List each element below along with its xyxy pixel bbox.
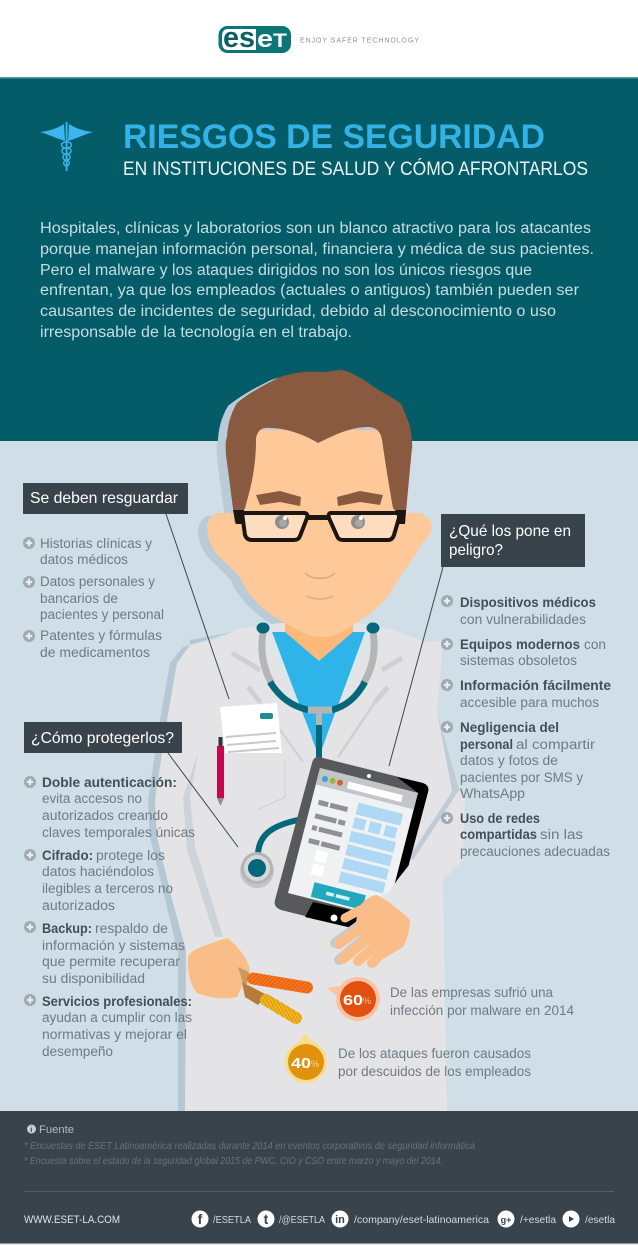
right hand: [335, 895, 410, 963]
social links: f: [198, 1211, 203, 1227]
list: how to protect: que permite recuperar: [42, 954, 181, 969]
face: [207, 430, 432, 637]
tablet: [275, 757, 428, 935]
heading: Cómo protegerlos: ¿Cómo protegerlos?: [31, 730, 174, 747]
fingers: [339, 925, 392, 963]
social links: g+: [501, 1215, 511, 1225]
logo: ESET: es: [223, 22, 255, 54]
social links: /@ESETLA: [279, 1214, 325, 1226]
list: how to protect: Backup:: [42, 921, 92, 936]
social links: /+esetla: [520, 1214, 556, 1226]
stat: 60%: De las empresas sufrió una: [390, 985, 553, 1000]
stat: 40%: [285, 1033, 531, 1083]
list: what to protect: pacientes y personal: [40, 607, 164, 622]
list: how to protect: ilegibles a terceros no: [42, 881, 173, 896]
list: dangers: con vulnerabilidades: [460, 612, 586, 627]
social links: /ESETLA: [213, 1214, 251, 1226]
title: RIESGOS DE SEGURIDAD: [123, 118, 545, 156]
icon: caduceus: [40, 122, 93, 171]
list: what to protect: bancarios de: [40, 591, 118, 606]
source heading: i: [30, 1125, 32, 1134]
list: dangers: personal: [460, 737, 513, 752]
list: what to protect: Datos personales y: [40, 574, 155, 589]
list: how to protect: ayudan a cumplir con las: [42, 1010, 192, 1025]
intro paragraph: irresponsable de la tecnología en el trabajo.: [40, 324, 352, 341]
list: what to protect: de medicamentos: [40, 645, 150, 660]
illustration: doctor: [148, 370, 465, 1111]
list: how to protect: [24, 775, 195, 1059]
nose and mouth: [305, 573, 335, 599]
social links: t: [264, 1211, 269, 1227]
source heading: Fuente: [39, 1124, 74, 1136]
list: what to protect: datos médicos: [40, 552, 128, 567]
intro paragraph: Pero el malware y los ataques dirigidos no son los únicos riesgos que: [40, 262, 532, 279]
list: dangers: pacientes por SMS y: [460, 770, 583, 785]
list: how to protect: claves temporales únicas: [42, 825, 195, 840]
glasses: [233, 510, 406, 540]
list: dangers: [441, 595, 611, 859]
list: how to protect: Doble autenticación:: [42, 775, 177, 790]
list: what to protect: Patentes y fórmulas: [40, 628, 162, 643]
stethoscope: [240, 622, 380, 888]
list: how to protect: desempeño: [42, 1044, 113, 1059]
yellow band-aid: [242, 982, 296, 1018]
heading: Se deben resguardar: Se deben resguardar: [30, 490, 179, 507]
heading: Qué los pone en peligro: peligro?: [449, 542, 503, 559]
coat fold: left sleeve: [183, 753, 223, 937]
list: how to protect: evita accesos no: [42, 791, 142, 806]
intro paragraph: Hospitales, clínicas y laboratorios son un blanco atractivo para los atacantes: [40, 220, 591, 237]
coat shadow: [148, 632, 233, 1111]
heading: Cómo protegerlos: [24, 722, 182, 753]
eyebrows: [256, 491, 383, 506]
list: dangers: Negligencia del: [460, 720, 559, 735]
shirt border lapels: [262, 634, 374, 740]
list: dangers: Dispositivos médicos: [460, 595, 596, 610]
orange band-aid: [238, 967, 307, 988]
shirt: [272, 632, 365, 757]
head shadow: [198, 373, 423, 640]
heading: Qué los pone en peligro: ¿Qué los pone en: [449, 523, 571, 540]
intro paragraph: causantes de incidentes de seguridad, debido al desconocimiento o uso: [40, 303, 556, 320]
logo: ESET: [218, 22, 291, 54]
panel: footer: [0, 1111, 638, 1245]
list: what to protect: [23, 536, 164, 660]
stat: 40%: %: [311, 1059, 319, 1069]
list: how to protect: respaldo de: [95, 921, 168, 936]
list: how to protect: información y sistemas: [42, 938, 185, 953]
stat: 60%: %: [363, 996, 371, 1006]
thumb: [345, 910, 360, 918]
stat: 60%: infección por malware en 2014: [390, 1003, 574, 1018]
list: dangers: datos y fotos de: [460, 753, 558, 768]
website: WWW.ESET-LA.COM: [24, 1214, 120, 1226]
finger shadows: [335, 925, 368, 960]
list: dangers: precauciones adecuadas: [460, 844, 610, 859]
stat: 60%: 60: [343, 992, 363, 1009]
heading: Se deben resguardar: [23, 483, 188, 514]
social links: /esetla: [585, 1214, 615, 1226]
left hand: [188, 938, 250, 998]
list: dangers: Uso de redes: [460, 811, 540, 826]
stat: 40%: por descuidos de los empleados: [338, 1064, 531, 1079]
list: dangers: WhatsApp: [460, 786, 525, 801]
subtitle: EN INSTITUCIONES DE SALUD Y CÓMO AFRONTARLOS: [123, 158, 588, 180]
list: how to protect: datos haciéndolos: [42, 864, 154, 879]
list: dangers: al compartir: [516, 737, 596, 752]
list: how to protect: autorizados: [42, 898, 115, 913]
list: how to protect: normativas y mejorar el: [42, 1027, 187, 1042]
hair: [226, 370, 412, 524]
business card: [220, 703, 282, 753]
list: how to protect: protege los: [96, 848, 165, 863]
social links: [192, 1210, 615, 1228]
social links: /company/eset-latinoamerica: [354, 1214, 489, 1226]
heading: Qué los pone en peligro: [441, 514, 585, 567]
stat: 40%: De los ataques fueron causados: [338, 1046, 531, 1061]
source notes: * Encuestas de ESET Latinoamérica realizadas durante 2014 en eventos corporativos de seguridad informática: [24, 1141, 475, 1152]
tablet screen: [288, 768, 418, 918]
list: how to protect: su disponibilidad: [42, 971, 145, 986]
list: dangers: sistemas obsoletos: [460, 653, 577, 668]
palm: [355, 895, 410, 958]
list: dangers: accesible para muchos: [460, 695, 599, 710]
neck: [285, 620, 353, 661]
intro paragraph: porque manejan información personal, financiera y médica de sus pacientes.: [40, 241, 594, 258]
leader lines: [166, 514, 443, 847]
logo: ESET: eT: [257, 26, 287, 53]
list: dangers: compartidas: [460, 827, 537, 842]
list: how to protect: autorizados creando: [42, 808, 168, 823]
list: what to protect: Historias clínicas y: [40, 536, 152, 551]
intro paragraph: [40, 220, 594, 341]
coat seams: [232, 653, 402, 810]
social links: in: [335, 1214, 345, 1226]
list: dangers: Información fácilmente: [460, 678, 611, 693]
list: dangers: sin las: [540, 827, 583, 842]
intro paragraph: enfrentan, ya que los empleados (actuales o antiguos) también pueden ser: [40, 282, 579, 299]
lab coat: [155, 623, 465, 1111]
source notes: [24, 1141, 475, 1167]
list: how to protect: Servicios profesionales:: [42, 994, 192, 1009]
source notes: * Encuesta sobre el estado de la seguridad global 2015 de PWC, CIO y CSO entre marzo y mayo del 2014.: [24, 1156, 443, 1167]
list: how to protect: Cifrado:: [42, 848, 93, 863]
stat: 40%: 40: [291, 1055, 311, 1072]
stat: 60%: [327, 977, 574, 1021]
list: dangers: Equipos modernos: [460, 637, 580, 652]
pen: [217, 737, 224, 806]
list: dangers: con: [584, 637, 606, 652]
coat fold: right sleeve: [409, 712, 459, 860]
right forearm: [378, 860, 443, 940]
logo tagline: ENJOY SAFER TECHNOLOGY: [300, 38, 419, 44]
